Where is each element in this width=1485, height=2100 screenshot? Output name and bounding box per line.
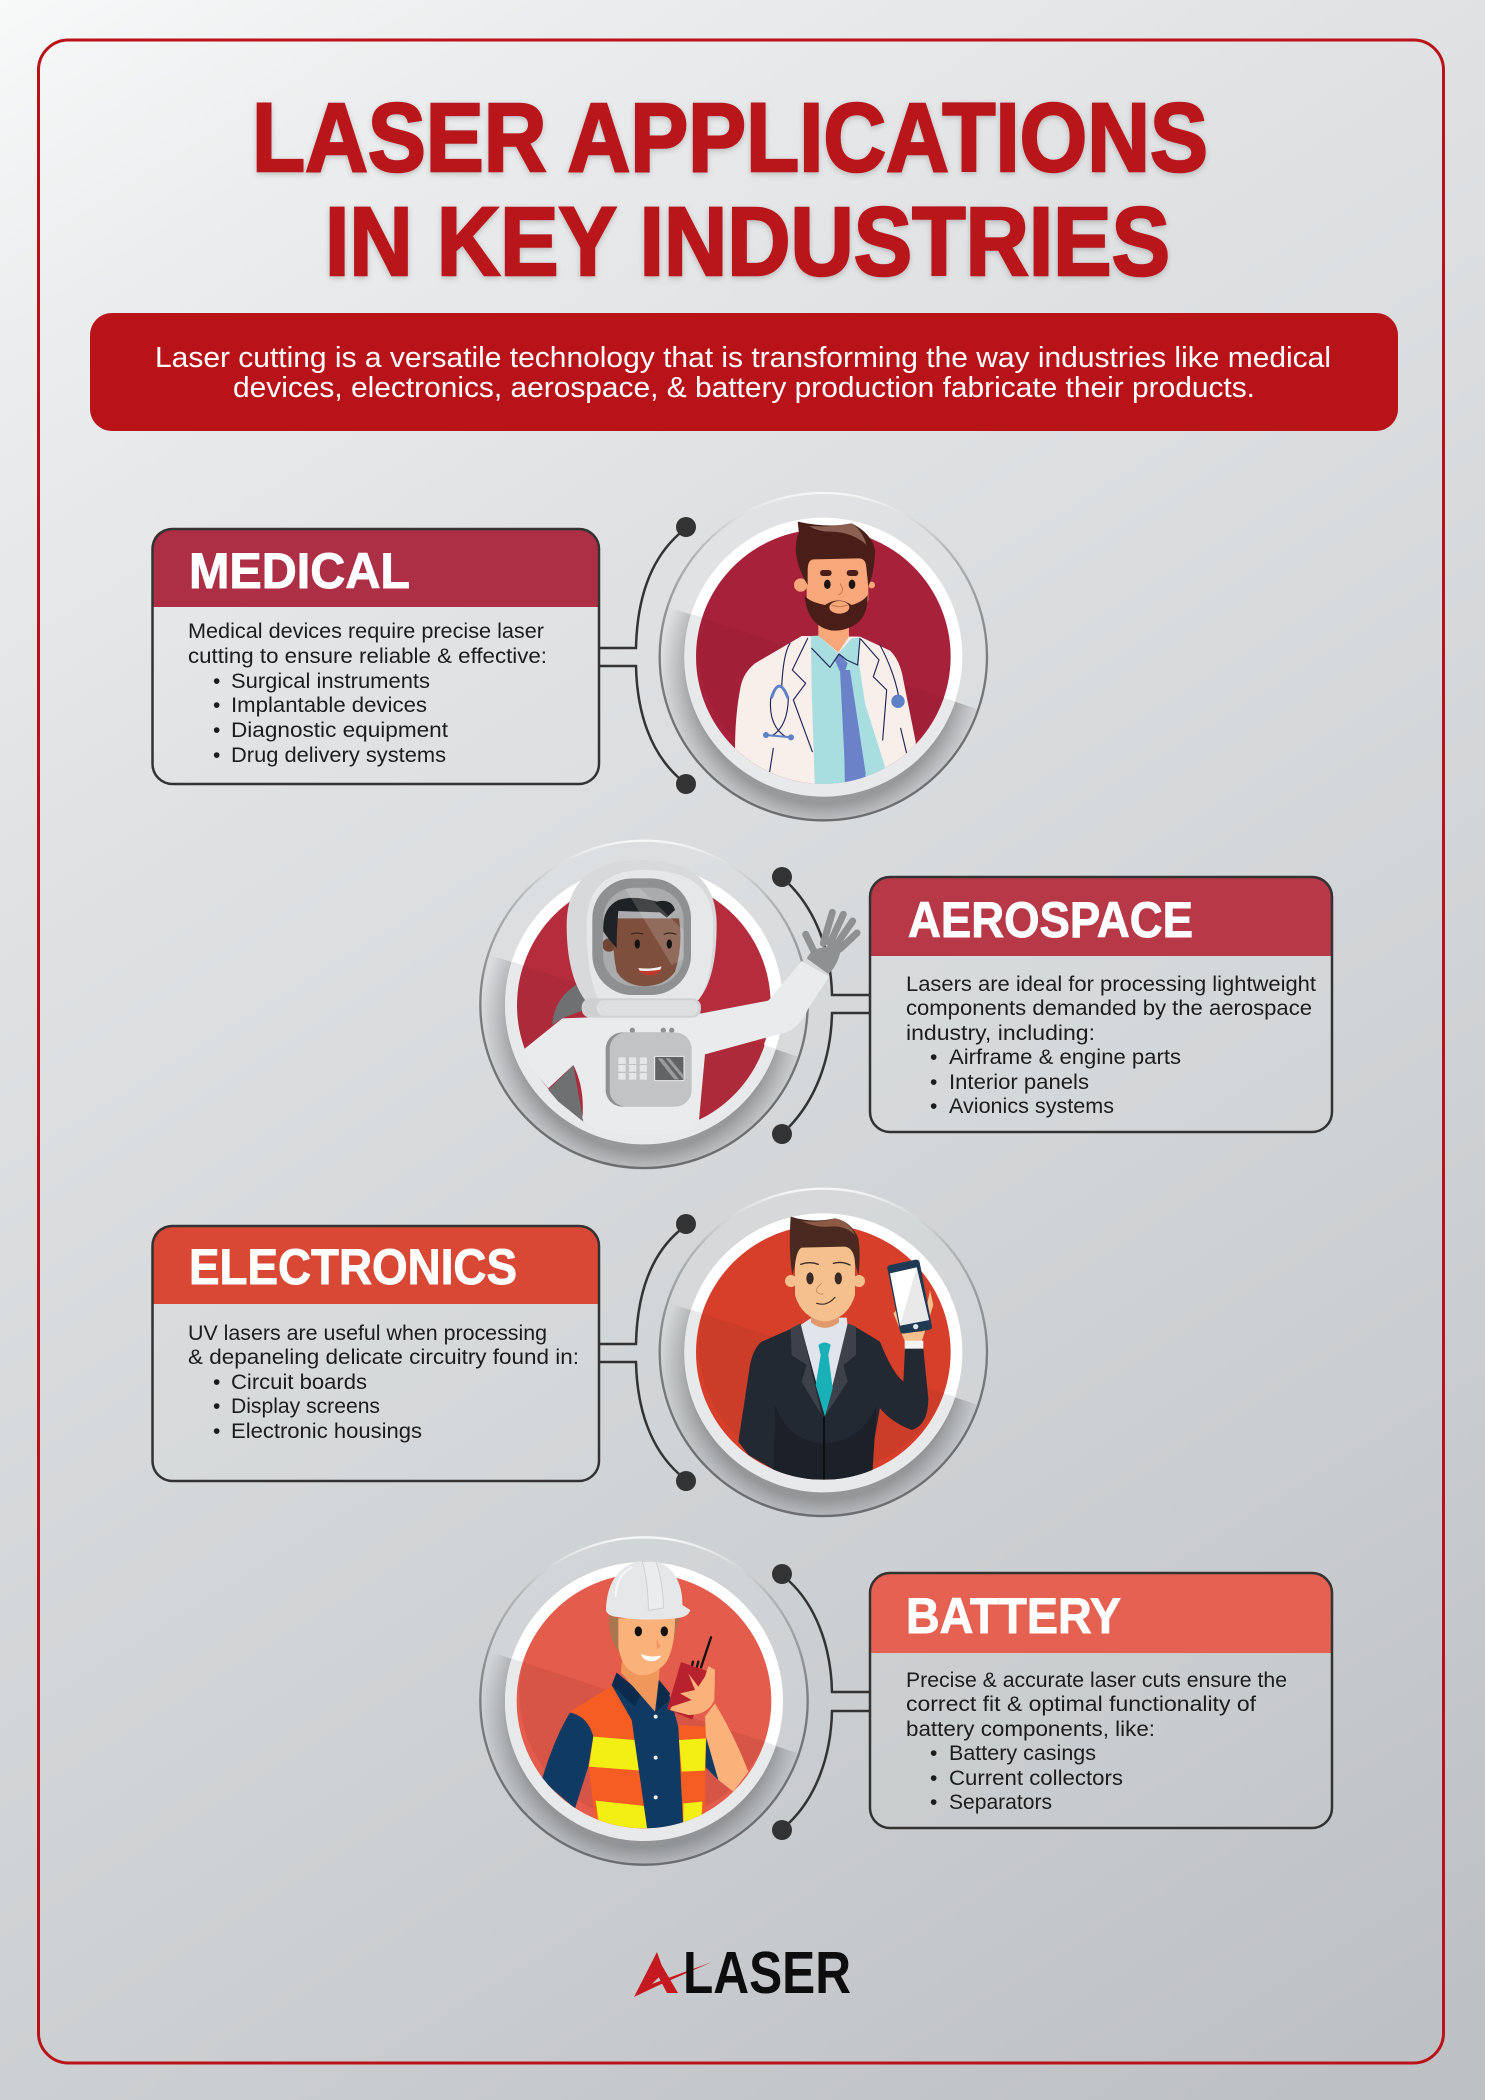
- intro banner: Laser cutting is a versatile technology that is transforming the way industries like medical: [155, 342, 1331, 374]
- panel: battery: [480, 1537, 1332, 1866]
- text: battery: •: [930, 1767, 937, 1790]
- heading: medical: MEDICAL: [189, 543, 410, 599]
- text: medical: •: [213, 670, 220, 693]
- text: battery: Battery casings: [949, 1742, 1096, 1765]
- text: battery: •: [930, 1791, 937, 1814]
- text: electronics: [188, 1322, 579, 1443]
- text: aerospace: •: [930, 1071, 937, 1094]
- icon: businessman portrait: [659, 1189, 987, 1517]
- text: electronics: UV lasers are useful when processing: [188, 1322, 547, 1345]
- text: aerospace: components demanded by the aerospace: [906, 997, 1312, 1020]
- title: LASER APPLICATIONS: [252, 83, 1208, 192]
- text: electronics: •: [213, 1395, 220, 1418]
- text: battery: correct fit & optimal functionality of: [906, 1693, 1256, 1716]
- icon: astronaut portrait: [480, 841, 857, 1169]
- text: aerospace: •: [930, 1046, 937, 1069]
- text: medical: •: [213, 744, 220, 767]
- icon: doctor portrait: [659, 493, 987, 822]
- text: electronics: Display screens: [231, 1395, 380, 1418]
- text: electronics: Circuit boards: [231, 1371, 367, 1394]
- text: battery: battery components, like:: [906, 1718, 1155, 1741]
- connector: medical: [599, 517, 696, 794]
- card: electronics: [152, 1226, 599, 1481]
- panel: electronics: [152, 1189, 987, 1517]
- text: medical: Surgical instruments: [231, 670, 430, 693]
- text: battery: [906, 1669, 1287, 1814]
- text: medical: Implantable devices: [231, 694, 427, 717]
- text: medical: Drug delivery systems: [231, 744, 446, 767]
- text: medical: •: [213, 719, 220, 742]
- text: electronics: •: [213, 1420, 220, 1443]
- panel: medical: [152, 493, 987, 822]
- connector: aerospace: [772, 867, 870, 1144]
- text: medical: [188, 620, 547, 767]
- heading: electronics: ELECTRONICS: [189, 1239, 517, 1295]
- intro banner: [90, 313, 1398, 431]
- heading: battery: BATTERY: [906, 1588, 1121, 1644]
- text: aerospace: Avionics systems: [949, 1095, 1114, 1118]
- connector: electronics: [599, 1214, 696, 1491]
- text: battery: Separators: [949, 1791, 1052, 1814]
- text: aerospace: [906, 973, 1316, 1118]
- text: medical: •: [213, 694, 220, 717]
- card: battery: [870, 1573, 1332, 1828]
- logo: [634, 1940, 851, 2006]
- text: medical: Medical devices require precise laser: [188, 620, 544, 643]
- panel: aerospace: [480, 841, 1332, 1169]
- text: electronics: Electronic housings: [231, 1420, 422, 1443]
- text: aerospace: Interior panels: [949, 1071, 1089, 1094]
- text: electronics: •: [213, 1371, 220, 1394]
- icon: construction worker portrait: [480, 1537, 808, 1866]
- text: aerospace: Airframe & engine parts: [949, 1046, 1181, 1069]
- card: aerospace: [870, 877, 1332, 1132]
- title: [252, 83, 1208, 296]
- text: battery: Precise & accurate laser cuts ensure the: [906, 1669, 1287, 1692]
- text: aerospace: Lasers are ideal for processing lightweight: [906, 973, 1316, 996]
- icon: glove: [806, 912, 857, 974]
- title: IN KEY INDUSTRIES: [325, 187, 1170, 296]
- connector: battery: [772, 1564, 870, 1840]
- card: medical: [152, 529, 599, 784]
- intro banner: devices, electronics, aerospace, & battery production fabricate their products.: [233, 372, 1255, 404]
- text: aerospace: •: [930, 1095, 937, 1118]
- text: battery: •: [930, 1742, 937, 1765]
- heading: aerospace: AEROSPACE: [908, 892, 1193, 948]
- icon: logo A swoosh: [634, 1952, 712, 1997]
- text: battery: Current collectors: [949, 1767, 1123, 1790]
- text: medical: Diagnostic equipment: [231, 719, 448, 742]
- text: aerospace: industry, including:: [906, 1022, 1095, 1045]
- logo: LASER: [683, 1940, 851, 2006]
- text: medical: cutting to ensure reliable & effective:: [188, 645, 547, 668]
- text: electronics: & depaneling delicate circuitry found in:: [188, 1346, 579, 1369]
